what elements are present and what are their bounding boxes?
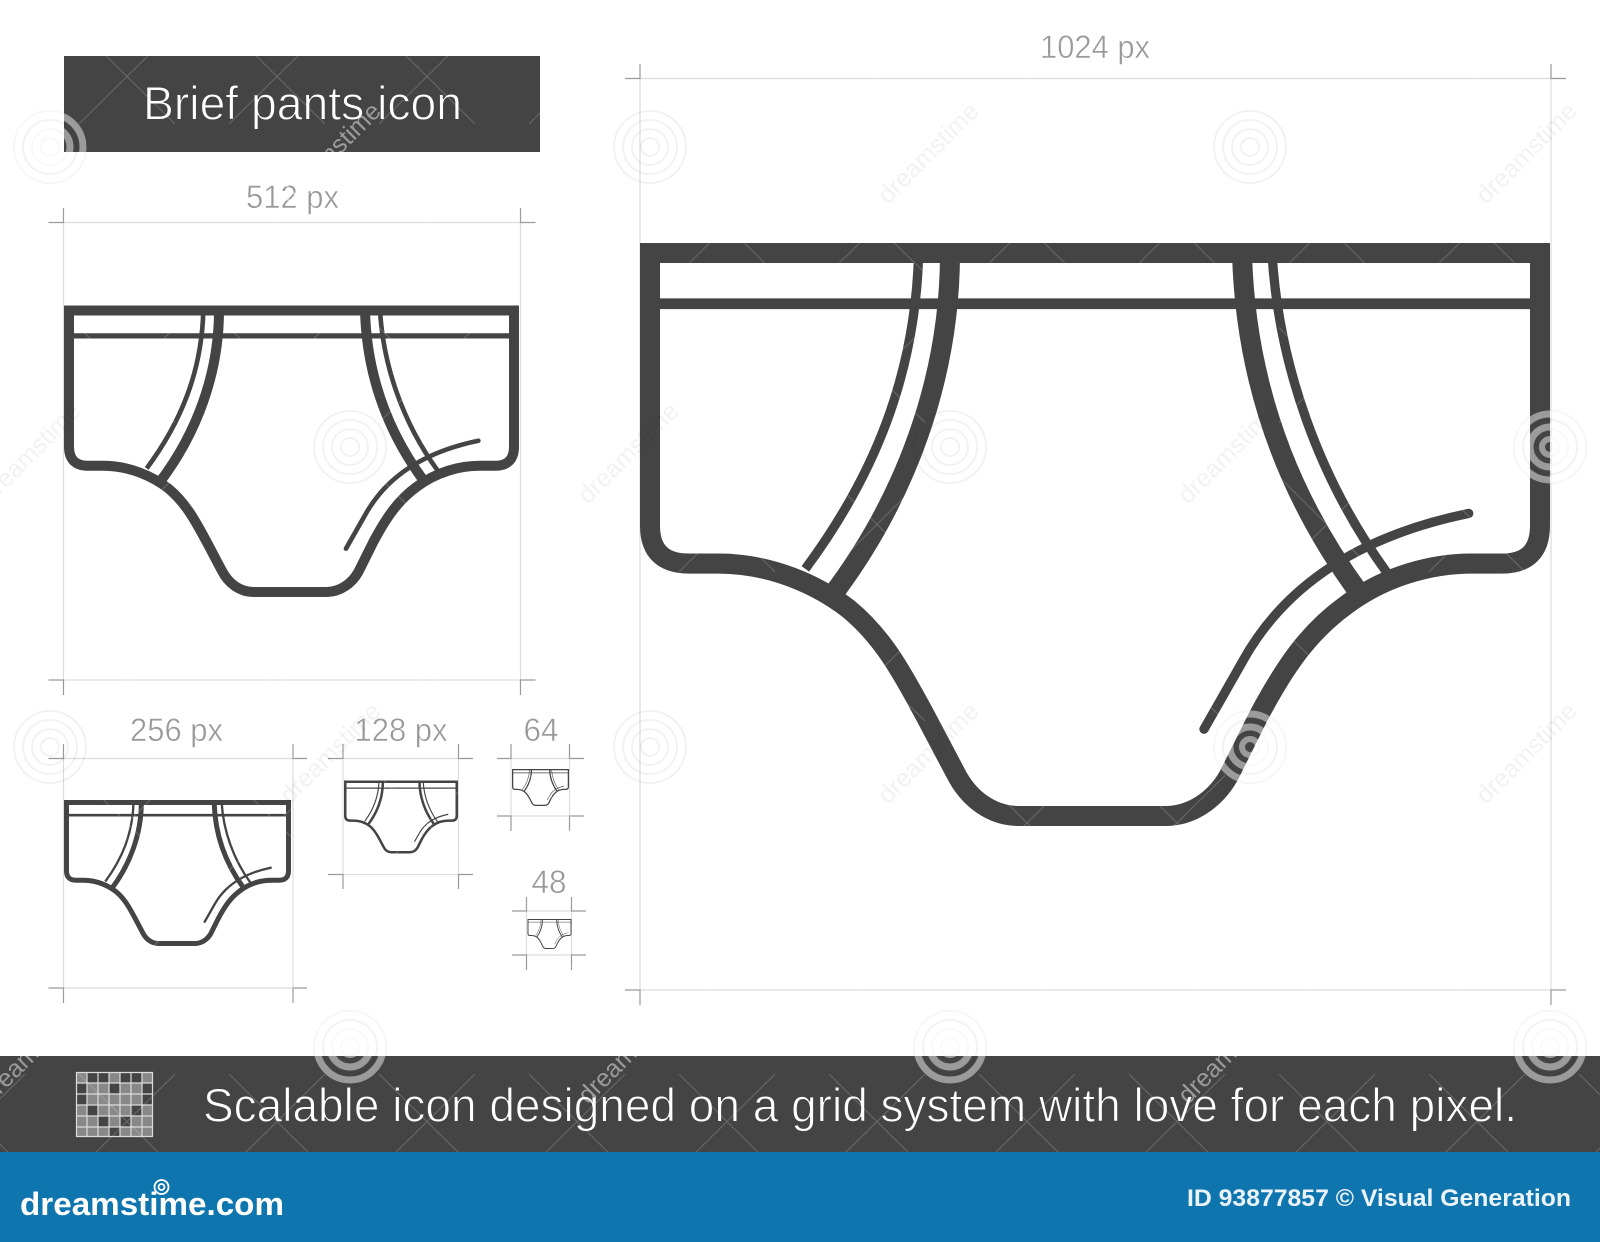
credit line: ID 93877857 © Visual Generation [1187,1185,1571,1212]
footer bar [0,1152,1600,1242]
watermark: light lattice, spirals and text on dark areas: dreamstime [274,97,387,209]
icon: brief pants 512 px [69,311,514,592]
panel: 1024 px size guide: 1024 px [1040,29,1150,65]
logo: dreamstime.com: dreamstime.com [20,1186,284,1222]
icon: brief pants 1024 px [650,253,1540,816]
watermark: faint spirals and text on white: dreamstime [274,697,387,809]
panel: 512 px size guide [48,179,536,695]
icon: brief pants 48 px [528,920,571,948]
panel: 48 px size guide [512,864,586,970]
icon: brief pants 64 px [513,770,568,805]
panel: 48 px size guide: 48 [532,864,566,900]
title banner [64,56,540,152]
grey tagline bar [0,1056,1600,1152]
title banner: Brief pants icon [143,76,462,130]
icon: brief pants 128 px [345,782,457,852]
watermark: faint spirals and text on white: dreamstime [872,697,985,809]
panel: 64 px size guide: 64 [524,712,558,748]
watermark: light lattice, spirals and text on dark areas: dreamstime [572,997,685,1109]
icon: pixel grid [76,1072,153,1137]
watermark: faint spirals and text on white [0,97,1586,1083]
grey tagline bar: Scalable icon designed on a grid system with love for each pixel. [203,1078,1517,1132]
panel: 128 px size guide [328,712,473,889]
watermark: light lattice, spirals and text on dark areas: dreamstime [1172,997,1285,1109]
panel: 128 px size guide: 128 px [354,712,448,748]
watermark: faint spirals and text on white: dreamstime [872,97,985,209]
panel: 512 px size guide: 512 px [246,179,339,215]
icon: brief pants 256 px [66,803,289,943]
panel: 256 px size guide [48,712,307,1003]
panel: 64 px size guide [497,712,584,831]
watermark: faint spirals and text on white: dreamstime [1172,397,1285,509]
watermark: faint spirals and text on white: dreamstime [1470,697,1583,809]
watermark: faint spirals and text on white: dreamstime [1470,97,1583,209]
panel: 256 px size guide: 256 px [130,712,223,748]
watermark: faint spirals and text on white: dreamstime [572,397,685,509]
